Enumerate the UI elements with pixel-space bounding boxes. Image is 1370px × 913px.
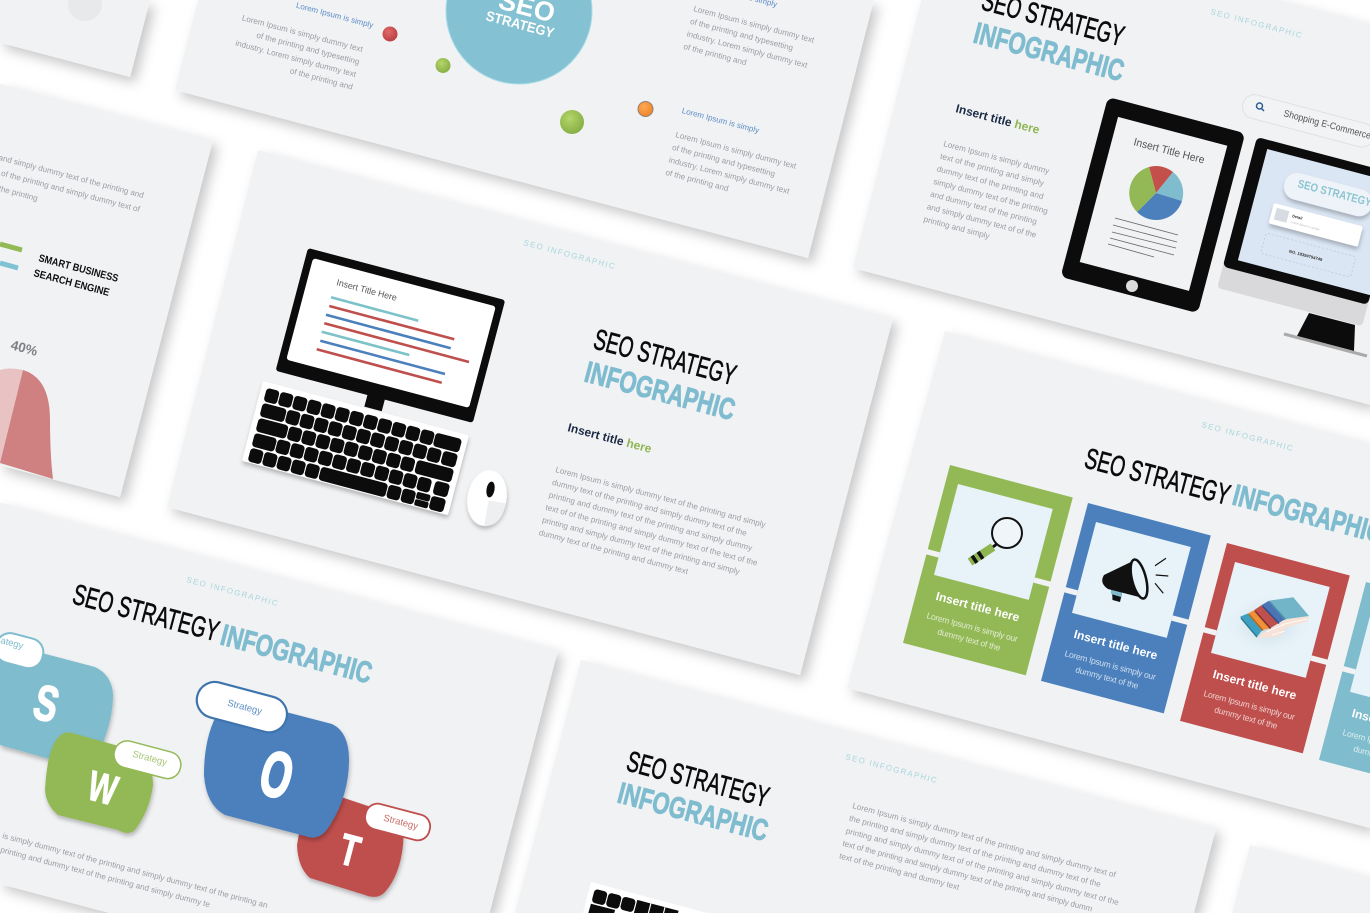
text block: right top lorem: industry. Lorem simply dummy text (686, 29, 809, 70)
keyboard (242, 381, 469, 515)
panel: center slide with computer (167, 150, 893, 675)
title: SEO STRATEGY (69, 579, 222, 648)
body text: Lorem Ipsum is simply dummy (942, 139, 1051, 176)
icon: stacked books (1222, 593, 1314, 657)
card: blue megaphone: Lorem Ipsum is simply our (1064, 648, 1157, 682)
title (970, 0, 1128, 88)
icon: small green ball (436, 58, 450, 73)
text block: left lorem: Lorem Ipsum is simply (295, 1, 374, 30)
panel: top-left cropped slide (0, 0, 150, 77)
block: W (45, 732, 184, 833)
card: red books (1179, 543, 1351, 754)
body text: dummy text of the printing and dummy text (538, 528, 690, 576)
desktop monitor: NO. 18394794749 (1289, 249, 1324, 262)
small label: SEO INFOGRAPHIC (1209, 7, 1305, 40)
circle: SEO strategy: STRATEGY (484, 7, 557, 41)
body text: and dummy text of the printing (929, 190, 1038, 226)
text block: left lorem (231, 0, 374, 93)
card: blue megaphone: Insert title here (1072, 627, 1159, 663)
body text: text of the printing and simply dummy text of the printing and simply dumm (842, 839, 1094, 913)
card: blue megaphone (1040, 503, 1212, 714)
subheading: Insert title here (566, 420, 654, 456)
text block: left lorem: industry. Lorem simply dummy text (235, 39, 358, 79)
search bar (1240, 92, 1370, 150)
body text: printing and simply dummy text of the printing and simply (541, 516, 742, 577)
title: INFOGRAPHIC (614, 777, 772, 848)
legend: SEARCH ENGINE (32, 267, 111, 299)
text block: left lorem: of the printing and (289, 66, 354, 92)
block: S (0, 630, 113, 762)
legend: SMART BUSINESS (37, 252, 120, 285)
card: teal cropped (1318, 582, 1370, 792)
icon: orange ball (638, 102, 653, 116)
panel: bottom-right cropped slide (1232, 845, 1370, 913)
block: T (297, 790, 433, 897)
body text: Lorem Ipsum is simply dummy text of the printing and simply (554, 465, 768, 530)
body text: and simply dummy text of the printing and (0, 153, 145, 200)
computer monitor: Insert Title Here (335, 277, 398, 303)
block: T: T (334, 825, 365, 877)
block: W: Strategy (131, 749, 168, 768)
card: blue megaphone: dummy text of the (1074, 665, 1140, 691)
panel: left slide with legend (0, 84, 213, 497)
subheading: Insert title here (954, 101, 1042, 137)
text block: right top lorem: Lorem Ipsum is simply dummy text (692, 4, 816, 45)
tablet (1060, 97, 1245, 313)
pie chart (1129, 166, 1183, 220)
block: O (193, 678, 349, 838)
bell chart (0, 368, 53, 479)
body text: is simply dummy text of the printing and simply dummy text of the printing an (1, 831, 269, 910)
body text: of the printing and simply dummy text of (0, 169, 142, 214)
block: W: W (83, 762, 123, 814)
circle: SEO strategy (446, 0, 592, 84)
body text: the printing and simply dummy text of the printing and dummy text of the (848, 814, 1102, 889)
desktop monitor: Lorem Ipsum is simply (1290, 220, 1321, 232)
body text: printing and dummy text of the printing and simply dummy (548, 490, 754, 553)
body text: text of the printing and simply (939, 152, 1046, 188)
body text: printing and simply (923, 215, 992, 241)
title (1081, 443, 1370, 550)
text block: right bottom lorem: industry. Lorem simply dummy text (668, 155, 791, 196)
panel: bottom-center slide (515, 660, 1216, 913)
tablet: Insert Title Here (1132, 136, 1206, 167)
body text: and simply dummy text of of the (926, 202, 1038, 240)
icon: large green ball (560, 110, 584, 134)
text block: right bottom lorem: Lorem Ipsum is simply (681, 106, 760, 135)
text block: left lorem: Lorem Ipsum is simply dummy text (241, 13, 365, 54)
text block: right top lorem: of the printing and typesetting (689, 17, 794, 53)
title: SEO STRATEGY (590, 324, 740, 392)
body text (838, 801, 1127, 913)
title: INFOGRAPHIC (581, 356, 739, 427)
title: SEO STRATEGY (1081, 443, 1233, 512)
text block: left lorem: of the printing and typesetting (255, 31, 360, 67)
body text: printing and dummy text of the printing and simply dummy te (0, 845, 211, 909)
card: green search (902, 465, 1074, 676)
title (581, 324, 740, 427)
text block: right bottom lorem: of the printing and (665, 168, 729, 193)
computer monitor (272, 248, 505, 434)
body text (923, 139, 1059, 253)
text block: right bottom lorem: Lorem Ipsum is simply dummy text (674, 130, 798, 171)
icon: megaphone (1102, 558, 1168, 602)
card: red books: dummy text of the (1213, 705, 1279, 731)
keyboard cropped (583, 882, 707, 913)
small label: SEO INFOGRAPHIC (522, 238, 618, 271)
body text: dummy text of the printing and (936, 164, 1044, 201)
block: S: S (28, 674, 65, 734)
block: T: Strategy (382, 813, 419, 832)
card: green search: Lorem Ipsum is simply our (926, 610, 1019, 644)
title: INFOGRAPHIC (217, 619, 375, 690)
text block: right bottom lorem: of the printing and typesetting (671, 143, 776, 179)
panel: right slide with four cards (847, 331, 1370, 828)
body text: text of of the printing and simply dummy text of the text of the (545, 503, 759, 568)
title (69, 579, 375, 690)
percentage label: 40% (9, 337, 39, 359)
icon: red ball (382, 26, 398, 42)
text block: right top lorem (683, 0, 822, 83)
desktop monitor: Detail (1292, 214, 1303, 221)
block: O: Strategy (226, 698, 263, 717)
card: red books: Lorem Ipsum is simply our (1203, 688, 1296, 722)
title (614, 746, 773, 848)
small label: SEO INFOGRAPHIC (185, 575, 281, 608)
body text: text of the printing and dummy text (838, 852, 961, 892)
body text: simply dummy text of the printing (933, 177, 1049, 216)
panel: bottom-left SWOT slide (0, 502, 558, 913)
small label: SEO INFOGRAPHIC (1200, 420, 1296, 453)
card: green search: dummy text of the (936, 627, 1002, 653)
body text: printing and simply dummy text of of the printing and simply dummy text of the (845, 826, 1120, 907)
body text (538, 465, 769, 593)
title: INFOGRAPHIC (970, 17, 1128, 88)
card: red books: Insert title here (1211, 667, 1298, 703)
body text: Lorem Ipsum is simply dummy text of the printing and simply dummy text of (851, 801, 1117, 880)
small label: SEO INFOGRAPHIC (844, 752, 940, 785)
card: green search: Insert title here (934, 589, 1021, 625)
icon: magnifier (970, 518, 1022, 562)
block: O: O (253, 736, 301, 813)
desktop monitor (1217, 137, 1370, 356)
panel: top slide with circle (175, 0, 874, 258)
title: SEO STRATEGY (623, 746, 773, 814)
legend (0, 244, 120, 299)
text block: right top lorem: of the printing and (683, 42, 747, 67)
body text: dummy text of the printing and simply dummy text of the (551, 478, 748, 538)
text block: right bottom lorem (665, 106, 804, 209)
icon: mouse (463, 467, 511, 529)
panel: top-right slide with tablet (853, 0, 1370, 405)
